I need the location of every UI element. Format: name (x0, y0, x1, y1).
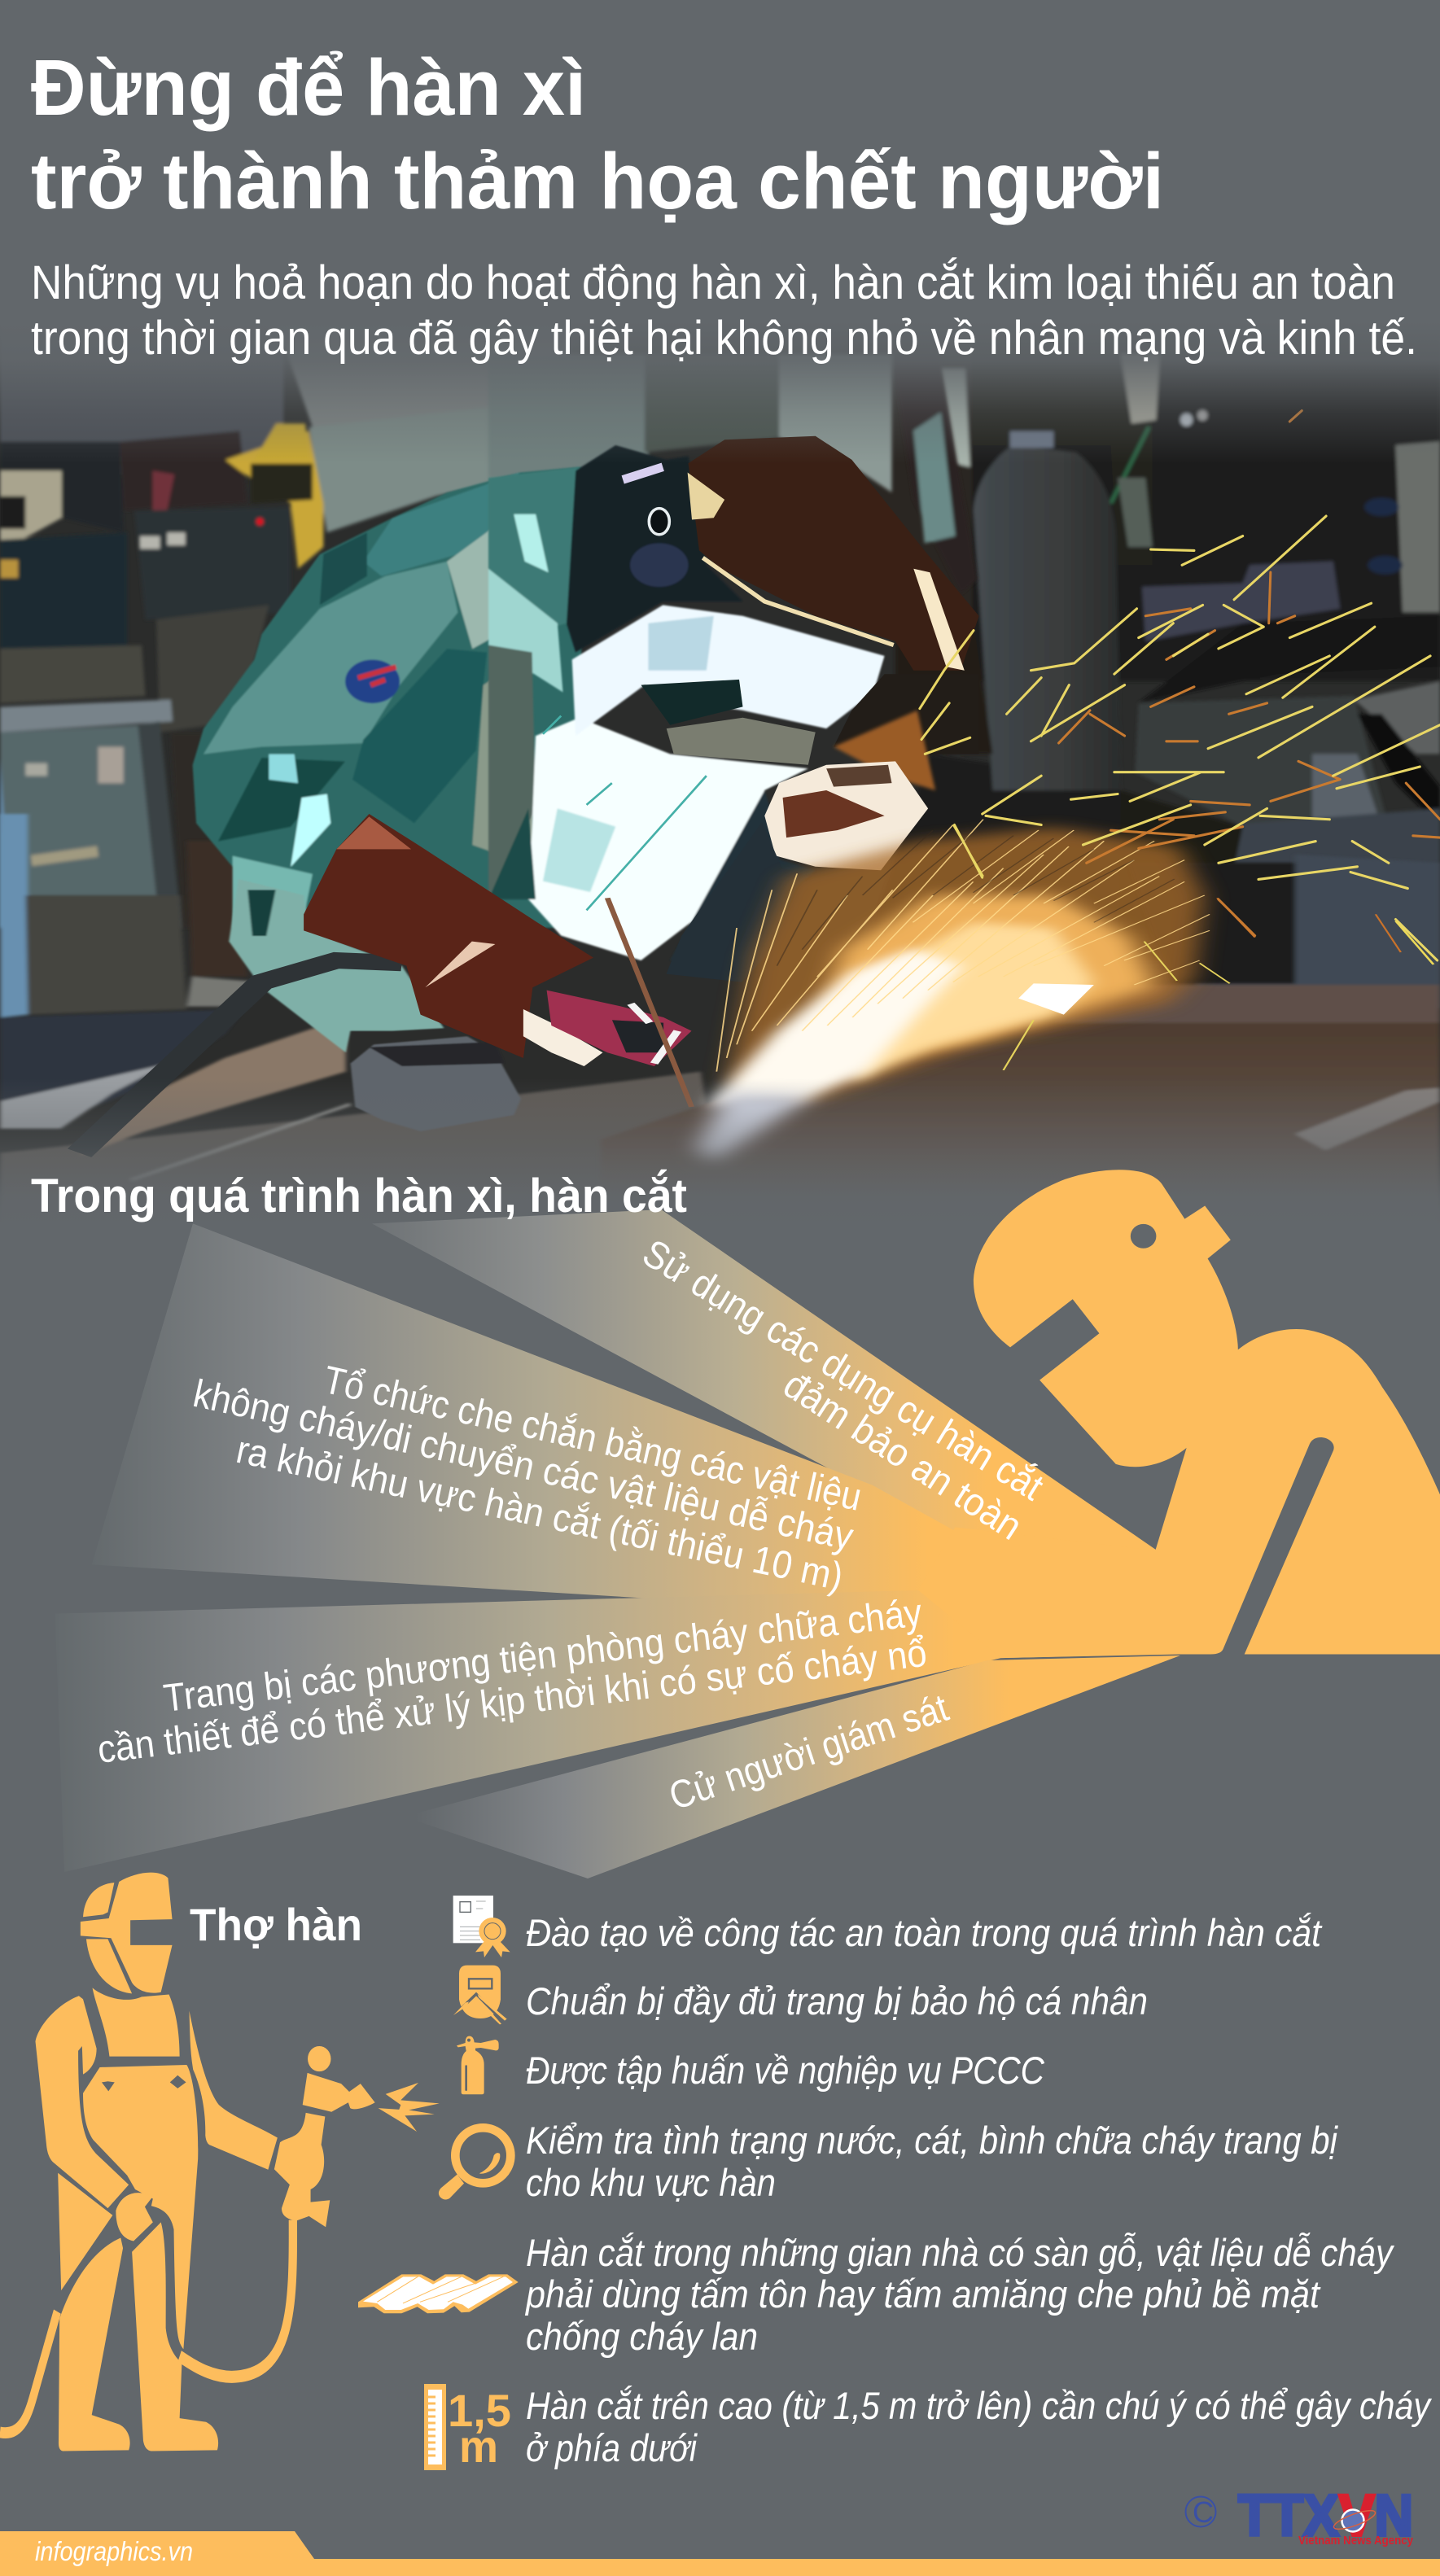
beam text: shielding: ra khỏi khu vực hàn cắt (tối thiểu 10 m) (233, 1428, 847, 1599)
leather glove, torch, boot and hose (80, 814, 692, 1153)
beam text: tools: Sử dụng các dụng cụ hàn cắt (635, 1231, 1051, 1509)
item: working at height: ở phía dưới (526, 2426, 698, 2469)
beam text: shielding: Tổ chức che chắn bằng các vật liệu (320, 1358, 865, 1520)
logo: TTXVN: TTXVN (1238, 2484, 1413, 2548)
scene left of worker (0, 357, 501, 929)
item: protective equipment: Chuẩn bị đầy đủ trang bị bảo hộ cá nhân (526, 1979, 1148, 2023)
lower beam (404, 1655, 1180, 1878)
footer band (0, 2531, 1440, 2576)
item: wooden floors (524, 2231, 1394, 2358)
item: fire training: Được tập huấn về nghiệp vụ PCCC (526, 2049, 1045, 2092)
icon: training certificate (453, 1896, 510, 1957)
scene floor and bench (0, 812, 707, 1188)
intro text (31, 256, 1417, 365)
item: inspection (526, 2119, 1338, 2204)
light beams fan (55, 1209, 1194, 1872)
figure: welder silhouette with mask (918, 1170, 1440, 1658)
heading: welder: Thợ hàn (190, 1899, 362, 1950)
photo fade bottom (0, 1078, 1440, 1227)
logo: TTXVN: Vietnam News Agency (1298, 2534, 1414, 2548)
beam text: equipment: cần thiết để có thể xử lý kịp thời khi có sự cố cháy nổ (95, 1632, 929, 1772)
scene behind head (488, 354, 977, 594)
beam text: shielding: không cháy/di chuyển các vật liệu dễ cháy (190, 1371, 857, 1559)
photo fade top (0, 321, 1440, 464)
welding hood and face shield (488, 436, 979, 960)
item: inspection: cho khu vực hàn (526, 2161, 776, 2204)
item: working at height (526, 2384, 1432, 2469)
icon: welding mask (453, 1966, 507, 2024)
beam text: supervisor: Cử người giám sát (664, 1686, 953, 1818)
spark glow (667, 820, 1433, 1164)
beam text: tools: đảm bảo an toàn (776, 1363, 1030, 1549)
icon: ruler 1,5 m: 1,5 (448, 2385, 511, 2436)
footer band: infographics.vn (35, 2536, 193, 2566)
item: safety training: Đào tạo về công tác an toàn trong quá trình hàn cắt (526, 1911, 1323, 1954)
worker body (193, 467, 581, 928)
icon: corrugated sheet (358, 2274, 519, 2313)
scene right of worker (843, 318, 1440, 1008)
scene floor right (604, 856, 1440, 1190)
welder checklist (524, 1911, 1432, 2469)
photo: welder at work with sparks (0, 361, 1440, 1185)
beam text: equipment: Trang bị các phương tiện phòng cháy chữa cháy (161, 1591, 924, 1721)
title: trở thành thảm họa chết người (31, 137, 1164, 225)
figure: welder with torch (0, 1873, 440, 2451)
icon: ruler 1,5 m (424, 2384, 511, 2472)
icon: magnifying glass (439, 2128, 510, 2200)
heading: during welding: Trong quá trình hàn xì, hàn cắt (31, 1170, 687, 1222)
icon: ruler 1,5 m: m (459, 2421, 498, 2472)
title: Đừng để hàn xì (31, 43, 586, 132)
item: inspection: Kiểm tra tình trạng nước, cát, bình chữa cháy trang bị (526, 2119, 1338, 2162)
icon: fire extinguisher (457, 2036, 499, 2094)
flying sparks (920, 411, 1440, 960)
item: wooden floors: chống cháy lan (526, 2315, 758, 2358)
logo: TTXVN: C (1193, 2495, 1214, 2529)
item: wooden floors: phải dùng tấm tôn hay tấm amiăng che phủ bề mặt (524, 2272, 1321, 2316)
title (31, 43, 1164, 225)
